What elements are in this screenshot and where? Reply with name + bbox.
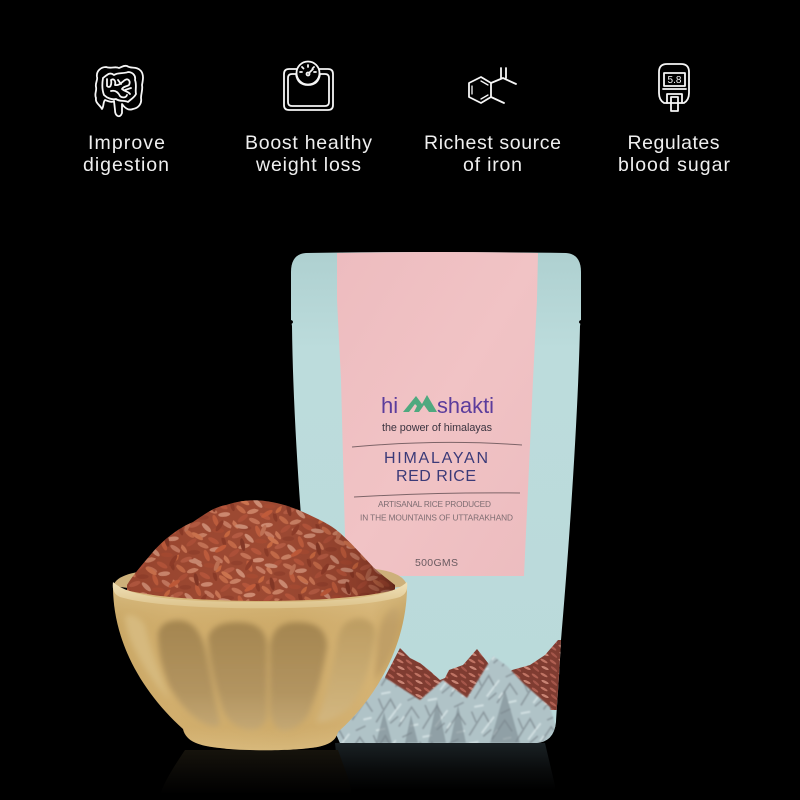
divider bottom xyxy=(354,493,520,497)
tear notches xyxy=(288,320,584,324)
red rice mountains xyxy=(385,640,562,710)
benefit: improve digestion xyxy=(83,66,169,176)
mountain illustration xyxy=(330,640,562,745)
label: Boost healthy weight loss xyxy=(245,132,372,176)
net weight: 500GMS xyxy=(415,557,458,569)
description: ARTISANAL RICE PRODUCED xyxy=(378,499,491,509)
bowl front rim xyxy=(113,582,407,608)
bowl of red rice xyxy=(110,500,410,755)
label: Boost healthy weight loss: Boost healthy xyxy=(245,132,372,154)
bowl flutes xyxy=(110,585,410,755)
bowl back rim xyxy=(113,569,407,606)
logo wordmark shakti: shakti xyxy=(437,393,494,418)
grey mountains xyxy=(330,656,556,745)
benefit: richest source of iron xyxy=(424,68,561,176)
label: Richest source of iron xyxy=(424,132,561,176)
brand logo xyxy=(381,393,494,434)
description xyxy=(360,499,513,522)
pink label panel xyxy=(337,252,538,576)
icon: weighing scale xyxy=(284,62,333,110)
icon: intestines xyxy=(95,66,143,116)
label: Boost healthy weight loss: weight loss xyxy=(255,154,361,176)
pouch reflection xyxy=(335,743,556,790)
product pouch xyxy=(288,252,584,745)
dark tree shading xyxy=(376,690,520,743)
rice mound xyxy=(127,500,395,610)
label: Richest source of iron: Richest source xyxy=(424,132,561,154)
reflection under product xyxy=(160,743,556,795)
bowl body xyxy=(113,586,407,750)
label: Regulates blood sugar: Regulates xyxy=(628,132,720,154)
product name: RED RICE xyxy=(396,468,476,485)
icon: glucose meter: 5.8 xyxy=(668,75,682,86)
description: IN THE MOUNTAINS OF UTTARAKHAND xyxy=(360,512,513,522)
label: Improve digestion: Improve xyxy=(88,132,165,154)
divider top xyxy=(352,442,522,447)
product name xyxy=(384,450,488,485)
benefit: boost healthy weight loss xyxy=(245,62,372,176)
label: Improve digestion xyxy=(83,132,169,176)
bowl reflection xyxy=(160,750,352,795)
label: Improve digestion: digestion xyxy=(83,154,169,176)
icon: molecule xyxy=(469,68,516,103)
pouch body xyxy=(291,252,581,743)
label: Regulates blood sugar: blood sugar xyxy=(618,154,730,176)
logo mountain mark xyxy=(403,395,437,412)
label: Regulates blood sugar xyxy=(618,132,730,176)
tagline: the power of himalayas xyxy=(382,422,493,434)
product name: HIMALAYAN xyxy=(384,450,488,467)
benefit: regulates blood sugar xyxy=(618,64,730,176)
label: Richest source of iron: of iron xyxy=(463,154,522,176)
logo wordmark hi: hi xyxy=(381,393,398,418)
